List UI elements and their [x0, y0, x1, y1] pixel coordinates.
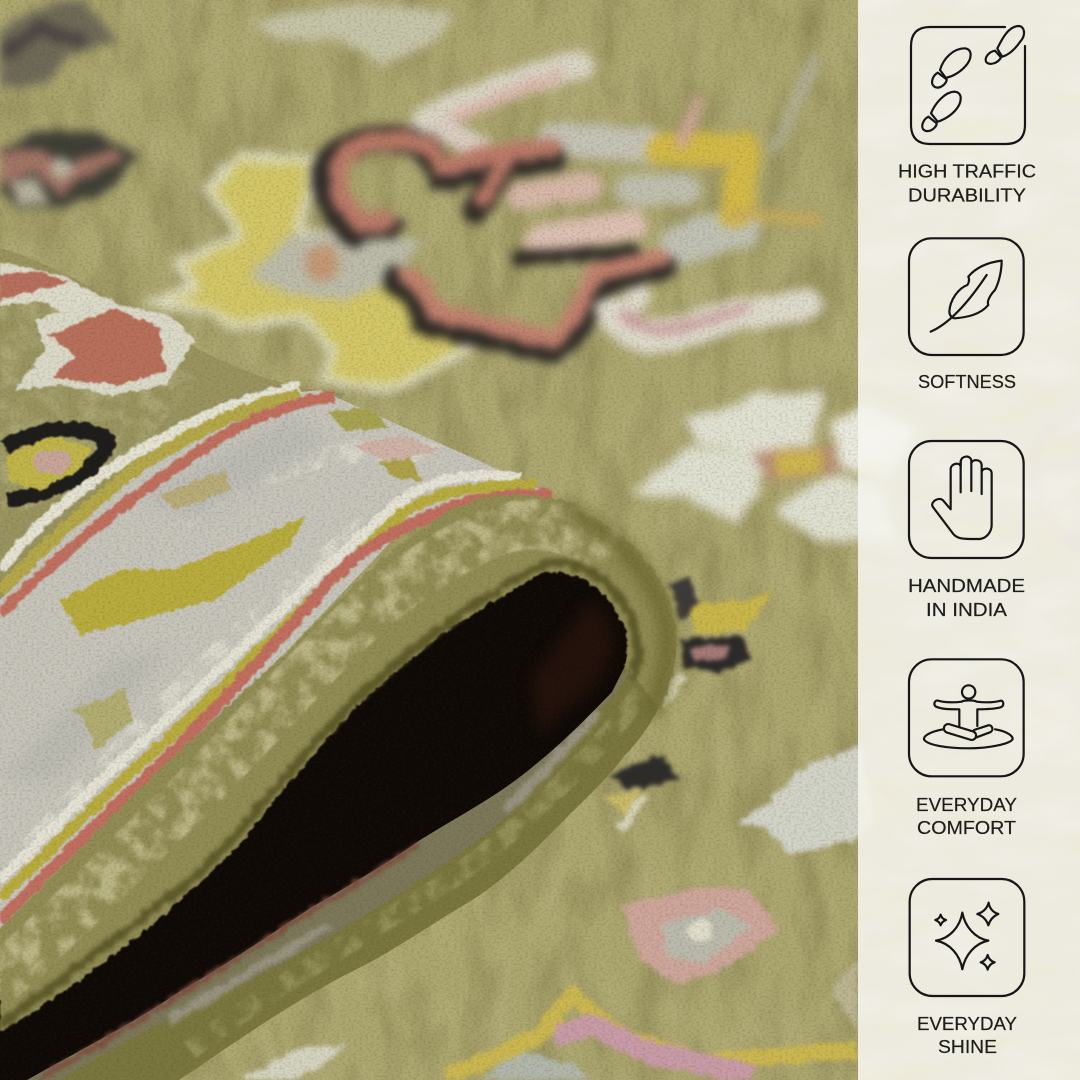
label — [898, 162, 1036, 206]
panel: translucent cream column — [858, 0, 1080, 1080]
label — [916, 795, 1017, 838]
label: EVERYDAY — [917, 1014, 1017, 1034]
icon: hand — [909, 441, 1024, 558]
label: SHINE — [938, 1037, 997, 1057]
motif: top-left dark flowers — [0, 0, 455, 208]
rug underside: woven back — [0, 670, 630, 1080]
label: SOFTNESS — [918, 372, 1016, 392]
rug top: olive field — [0, 248, 345, 640]
folded rug corner — [0, 248, 677, 1080]
border lines: yellow, pink and ivory stripes — [0, 387, 553, 921]
icon: meditating figure — [909, 659, 1024, 776]
rope highlights — [190, 692, 642, 1050]
binding light and dark stitches — [0, 508, 667, 1024]
ivory highlights — [0, 415, 440, 860]
label: HIGH TRAFFIC — [898, 162, 1036, 182]
feature 1: high traffic durability — [898, 26, 1036, 205]
dark hollow under the fold — [0, 560, 640, 1080]
label: HANDMADE — [908, 576, 1025, 596]
icon: sparkles — [910, 879, 1024, 996]
label: COMFORT — [917, 818, 1016, 838]
motif: small dark and yellow flower beside the fold — [600, 575, 775, 830]
border motifs: yellow leaves — [60, 408, 440, 750]
flower on rug top — [5, 300, 195, 500]
motif: white flower, right — [640, 395, 1080, 550]
feature 2: softness — [909, 238, 1024, 392]
label: DURABILITY — [908, 186, 1026, 206]
label: IN INDIA — [926, 600, 1007, 620]
motif: lower flowers — [240, 745, 875, 1080]
rug top: ivory border — [0, 390, 553, 929]
label — [908, 576, 1025, 620]
rug underside: lower rope binding — [0, 630, 676, 1080]
icon: feather — [909, 238, 1024, 355]
motif: central floral with scrolls — [150, 60, 815, 390]
label — [917, 1014, 1017, 1057]
rug top: binding edge — [0, 494, 677, 1032]
feature 4: everyday comfort — [909, 659, 1024, 838]
feature 3: handmade in india — [908, 441, 1025, 620]
feature 5: everyday shine — [910, 879, 1024, 1057]
label: EVERYDAY — [916, 795, 1017, 815]
woven texture over the photo — [0, 0, 858, 1080]
icon: footprints — [911, 26, 1025, 144]
rug top: pink edge band — [0, 262, 120, 322]
